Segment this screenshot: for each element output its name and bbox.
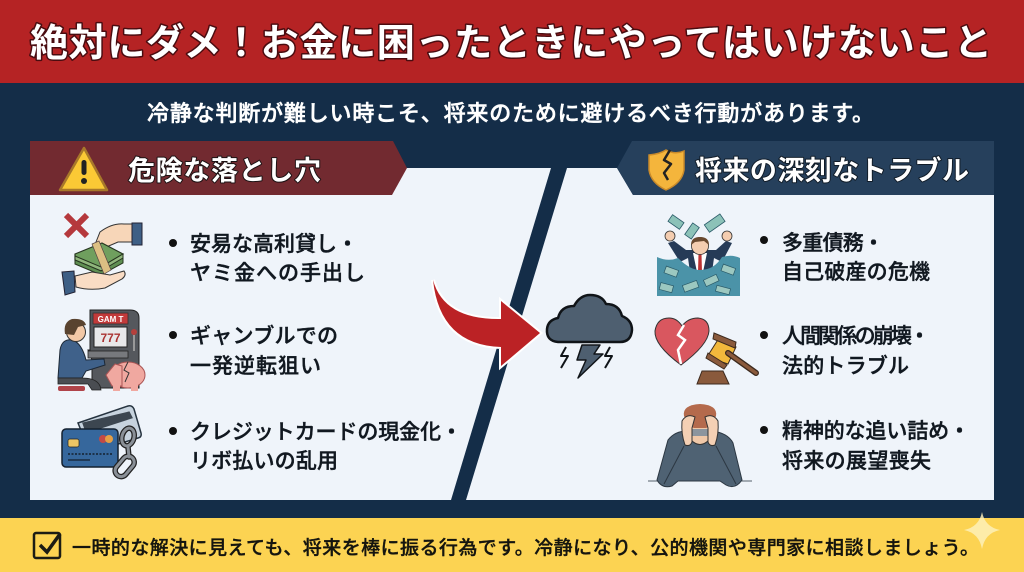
arrow: red curved arrow [433, 280, 540, 366]
footer message: 一時的な解決に見えても、将来を棒に振る行為です。冷静になり、公的機関や専門家に相談しましょう。 [72, 537, 979, 559]
icon: broken heart and gavel [655, 318, 756, 384]
panel: serious future trouble [466, 141, 994, 500]
panel header: pitfalls [30, 141, 407, 195]
panel header: trouble [617, 141, 994, 195]
heading: pitfalls: 危険な落とし穴 [128, 156, 321, 186]
text: mental distress [760, 420, 970, 473]
text: multiple debts: 多重債務・ [782, 232, 884, 255]
text: multiple debts: 自己破産の危機 [782, 261, 930, 284]
text: relationship breakdown: 人間関係の崩壊・ [782, 325, 930, 348]
icon: gambler at slot machine with broken piggy bank [58, 310, 145, 391]
panel: dangerous pitfalls [30, 141, 551, 500]
text: high-interest loans [169, 233, 365, 285]
text: gambling: 一発逆転狙い [190, 355, 321, 378]
text: credit card cashing: クレジットカードの現金化・ [190, 421, 462, 444]
icon: man drowning in debt [657, 214, 740, 296]
title: 絶対にダメ！お金に困ったときにやってはいけないこと [30, 23, 992, 65]
subtitle: 冷静な判断が難しい時こそ、将来のために避けるべき行動があります。 [147, 101, 874, 126]
heading: trouble: 将来の深刻なトラブル [695, 155, 969, 186]
icon: sparkle [964, 512, 1000, 549]
text: relationship breakdown [760, 325, 930, 378]
footer bar [0, 512, 1024, 572]
text: gambling: ギャンブルでの [190, 324, 338, 348]
icon: distressed person holding head [648, 404, 752, 487]
text: multiple debts [760, 232, 930, 284]
icon: gambler at slot machine with broken piggy bank: GAM T [98, 315, 123, 324]
icon: checkbox [34, 533, 60, 558]
text: high-interest loans: ヤミ金への手出し [190, 262, 365, 285]
icon: storm cloud with lightning [547, 295, 632, 378]
text: credit card cashing: リボ払いの乱用 [190, 450, 338, 473]
icon: warning triangle [60, 148, 107, 190]
icon: gambler at slot machine with broken piggy bank: 777 [100, 331, 121, 345]
text: relationship breakdown: 法的トラブル [782, 354, 909, 378]
text: high-interest loans: 安易な高利貸し・ [190, 233, 358, 256]
text: mental distress: 将来の展望喪失 [782, 450, 931, 473]
text: mental distress: 精神的な追い詰め・ [782, 420, 970, 443]
text: gambling [169, 324, 338, 378]
title banner [0, 0, 1024, 83]
icon: credit cards and chain [62, 406, 141, 479]
text: credit card cashing [169, 421, 462, 473]
icon: high-interest loan money and hands [62, 215, 142, 295]
icon: cracked shield [649, 150, 684, 190]
